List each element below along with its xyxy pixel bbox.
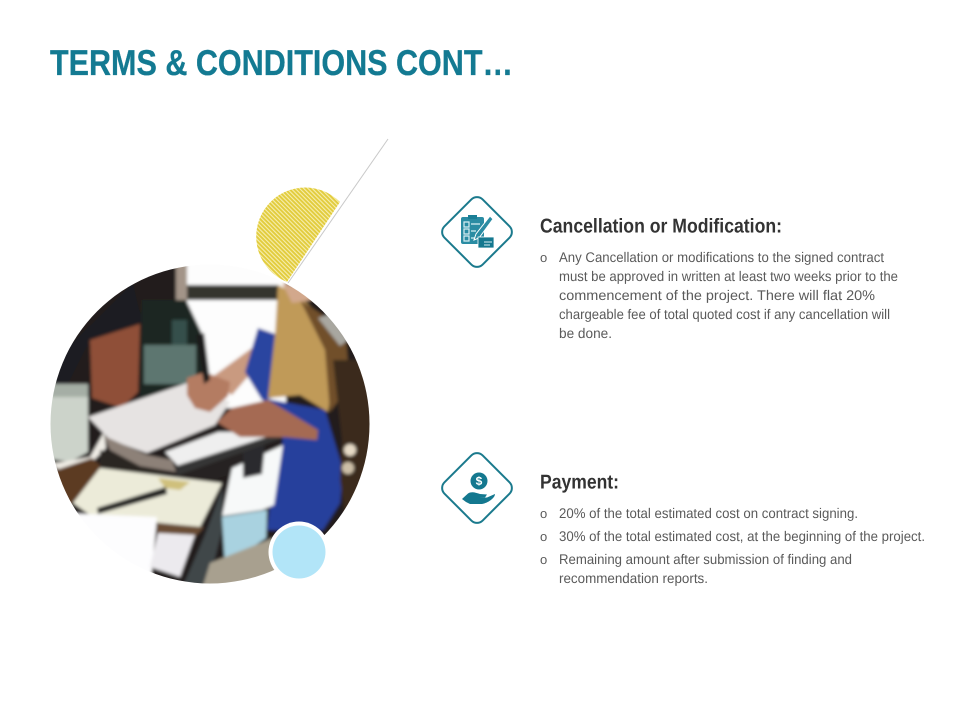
- cancellation text block: must be approved in written at least two weeks prior to the: [559, 268, 898, 284]
- cancellation text block: commencement of the project. There will flat 20%: [559, 287, 875, 303]
- cup: [50, 394, 92, 463]
- notebook shadow pages: [104, 436, 176, 472]
- icon: hand holding dollar coin in diamond: [439, 450, 515, 526]
- decorative diagonal line: [288, 139, 388, 283]
- heading: cancellation: Cancellation or Modification:: [540, 216, 782, 238]
- payment text block: 30% of the total estimated cost, at the beginning of the project.: [559, 528, 925, 544]
- payment text block: recommendation reports.: [559, 570, 708, 586]
- blond hair: [268, 285, 335, 412]
- front hand and arm: [217, 400, 318, 440]
- laptop edge: [183, 487, 223, 586]
- upper notebook: [88, 383, 230, 453]
- payment text block: o: [540, 506, 547, 521]
- cancellation text block: [540, 249, 898, 341]
- blue sleeve: [245, 328, 278, 400]
- title: TERMS & CONDITIONS CONT…: [50, 42, 513, 83]
- foreground blur right: [332, 358, 370, 510]
- icon: hand holding dollar coin in diamond: $: [476, 474, 483, 488]
- white papers bottom-left: [76, 510, 160, 574]
- light blue circle with white ring: [268, 522, 330, 582]
- lower paper: [73, 468, 222, 527]
- brown desk behind keyboard: [157, 523, 204, 537]
- hair clip highlight: [318, 314, 348, 346]
- payment text block: [540, 505, 925, 586]
- cancellation text block: o: [540, 250, 547, 265]
- jeans: [222, 510, 267, 566]
- blue shirt: [262, 398, 343, 530]
- dark gap under spiral: [180, 452, 245, 479]
- table wood: [58, 456, 102, 504]
- right white table: [222, 445, 283, 516]
- pen: [196, 333, 210, 384]
- cancellation text block: chargeable fee of total quoted cost if any cancellation will: [559, 306, 890, 322]
- black pen on paper: [97, 487, 167, 514]
- yellow patch: [158, 478, 190, 490]
- payment text block: o: [540, 529, 547, 544]
- icon: checklist and pen in diamond: [439, 194, 515, 270]
- yellow striped half circle: [256, 188, 340, 282]
- saucer: [50, 432, 106, 470]
- head skin: [282, 283, 312, 303]
- window post: [176, 258, 187, 320]
- payment text block: Remaining amount after submission of finding and: [559, 551, 852, 567]
- left arm: [90, 324, 140, 408]
- window bar: [187, 285, 278, 300]
- cancellation text block: Any Cancellation or modifications to the signed contract: [559, 249, 884, 265]
- writing hand: [187, 372, 230, 412]
- keyboard: [150, 533, 195, 577]
- cancellation text block: be done.: [559, 325, 612, 341]
- circular photo: people writing at a table: [40, 258, 375, 590]
- heading: payment: Payment:: [540, 472, 619, 494]
- dark sleeve: [45, 283, 142, 400]
- payment text block: 20% of the total estimated cost on contract signing.: [559, 505, 858, 521]
- dark under notebooks: [98, 448, 136, 468]
- dark chair area: [140, 300, 205, 405]
- payment text block: o: [540, 552, 547, 567]
- forearm writing: [213, 347, 254, 396]
- knit sleeve: [201, 536, 274, 584]
- dark post: [243, 445, 265, 478]
- window background: [186, 258, 286, 408]
- lower notebook with spiral: [165, 432, 282, 466]
